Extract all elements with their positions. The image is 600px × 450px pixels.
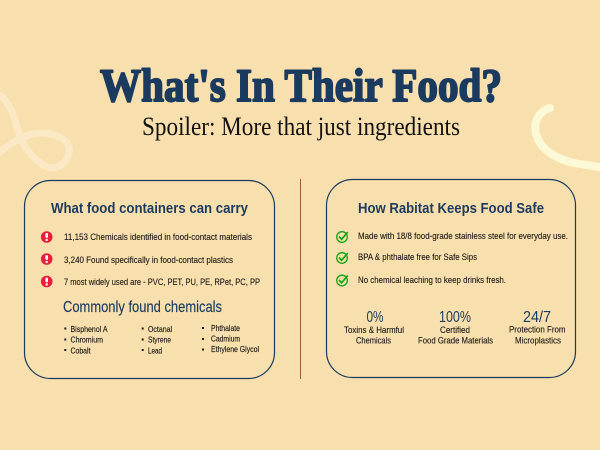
- chemical list: column 1: [64, 324, 108, 356]
- stat: 100%: 100%: [439, 309, 471, 326]
- stat: 100%: Food Grade Materials: [418, 336, 493, 346]
- subtitle: Spoiler: More that just ingredients: [142, 112, 460, 141]
- title: What's In Their Food?: [100, 60, 502, 112]
- icon: check 2: [337, 253, 348, 263]
- icon: alert 3: [41, 276, 52, 287]
- chemical list: column 2: Styrene: [148, 334, 171, 344]
- heading: How Rabitat Keeps Food Safe: [358, 201, 544, 217]
- chemical list: column 1: Bisphenol A: [70, 324, 108, 334]
- divider: [300, 179, 302, 379]
- decorative swirl: left: [0, 94, 69, 168]
- panel: what food containers can carry: [24, 180, 274, 378]
- stat: 0%: Chemicals: [356, 336, 391, 346]
- icon: check 3: [337, 275, 348, 286]
- chemical list: column 2: Octanal: [148, 324, 172, 334]
- decorative swirl: right: [535, 108, 600, 168]
- chemical list: column 1: Chromium: [70, 334, 103, 344]
- chemical list: column 1: Cobalt: [70, 346, 91, 356]
- panel: how rabitat keeps food safe: [326, 180, 576, 378]
- stat: 24/7: Protection From: [509, 324, 566, 334]
- chemical list: column 3: Ethylene Glycol: [211, 344, 259, 354]
- chemical list: column 3: Cadmium: [211, 334, 240, 344]
- benefit 2: BPA & phthalate free for Safe Sips: [358, 252, 477, 262]
- stat: 100%: Certified: [440, 325, 470, 335]
- stat: 0%: [344, 309, 404, 346]
- stat: 24/7: Microplastics: [515, 336, 561, 346]
- icon: alert 1: [41, 231, 52, 243]
- chemical list: column 2: Lead: [148, 346, 162, 356]
- heading: What food containers can carry: [51, 201, 248, 217]
- icon: alert 2: [41, 253, 52, 265]
- stat: 0%: Toxins & Harmful: [344, 325, 404, 335]
- chemical list: column 3: Phthalate: [211, 323, 240, 333]
- icon: check 1: [337, 232, 348, 242]
- fact 3: 7 most widely used are - PVC, PET, PU, PE, RPet, PC, PP: [64, 277, 260, 287]
- stat: 24/7: [509, 309, 566, 346]
- stat: 24/7: 24/7: [523, 309, 551, 326]
- stat: 100%: [418, 309, 493, 346]
- chemical list: column 2: [142, 324, 172, 356]
- benefit 3: No chemical leaching to keep drinks fresh.: [358, 275, 506, 285]
- benefit 1: Made with 18/8 food-grade stainless steel for everyday use.: [358, 231, 568, 241]
- fact 1: 11,153 Chemicals identified in food-contact materials: [64, 232, 252, 242]
- fact 2: 3,240 Found specifically in food-contact plastics: [64, 255, 233, 265]
- chemical list: column 3: [202, 323, 259, 354]
- stat: 0%: 0%: [366, 309, 384, 326]
- subheading: Commonly found chemicals: [63, 299, 222, 316]
